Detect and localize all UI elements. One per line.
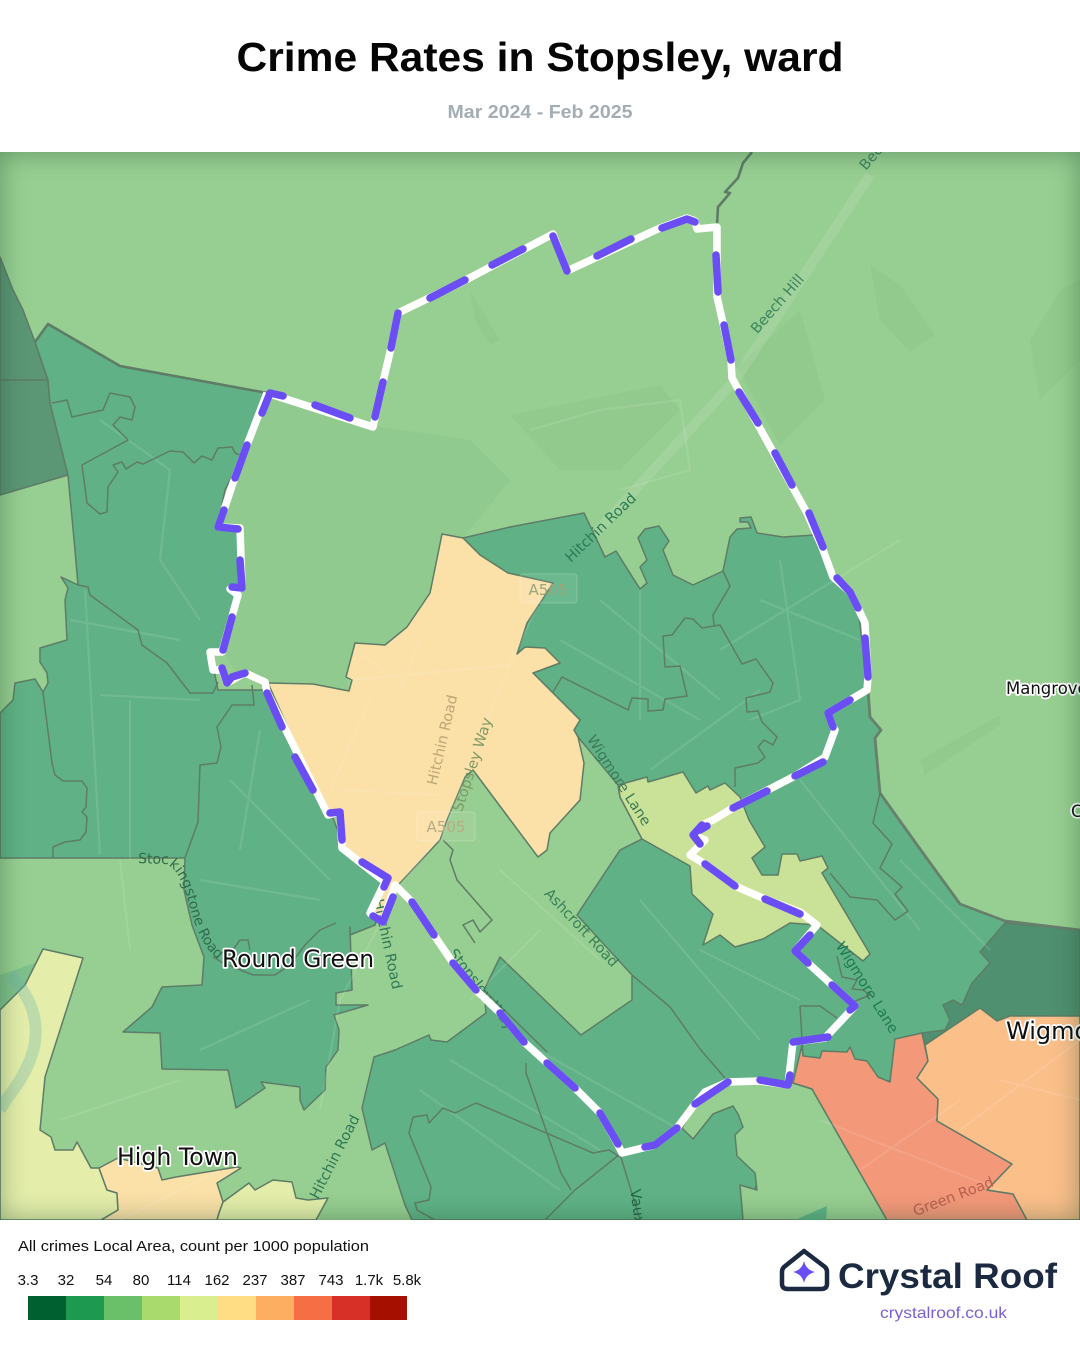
- place: Round Green: Round Green: [222, 945, 374, 973]
- label: Green Road: Green Road: [911, 1175, 996, 1220]
- label: Hitchin Road below ward: Hitchin Road: [370, 898, 404, 991]
- legend scale values: 54: [96, 1272, 112, 1289]
- area: ward north-west fields: [218, 392, 510, 691]
- label: A505 north: A505: [529, 581, 567, 599]
- area: faint terrain patches: [470, 265, 1080, 775]
- legend scale values: 32: [58, 1272, 74, 1289]
- legend colour ramp: [28, 1296, 407, 1320]
- label: Stopsley Way lower: Stopsley Way: [445, 946, 518, 1033]
- legend title: All crimes Local Area, count per 1000 population: [18, 1238, 369, 1255]
- legend: [18, 1238, 422, 1320]
- legend scale values: 237: [242, 1272, 268, 1289]
- logo wordmark: Crystal Roof: [838, 1257, 1057, 1296]
- label: Stopsley Way centre: Stopsley Way: [451, 716, 496, 814]
- label: Stockingstone Road: [138, 863, 220, 961]
- area: cream Stopsley: [268, 534, 584, 920]
- roads: faint street network: [60, 400, 1080, 1220]
- legend scale values: 80: [133, 1272, 149, 1289]
- label: Wigmore Lane south: Wigmore Lane: [832, 939, 901, 1036]
- label: Vauxhall Way: Vauxhall Way: [626, 1188, 656, 1287]
- logo: Crystal Roof: [782, 1251, 1057, 1322]
- label: Hitchin Road centre: Hitchin Road: [425, 693, 461, 787]
- road: Beech Hill and Hitchin Road corridor: [585, 175, 870, 545]
- label: A505 north: [520, 574, 577, 603]
- legend scale values: 5.8k: [393, 1272, 422, 1289]
- label: Hitchin Road south: Hitchin Road: [307, 1113, 363, 1202]
- area: small west patch: [0, 963, 35, 1009]
- legend scale values: 1.7k: [355, 1272, 384, 1289]
- area: dark north-west: [0, 257, 68, 495]
- label: A505 south: A505: [427, 818, 465, 836]
- label: Wigmore Lane north: Wigmore Lane: [583, 733, 654, 829]
- area: central and east mid-green: [362, 513, 1005, 1220]
- title: Crime Rates in Stopsley, ward: [236, 34, 844, 80]
- legend scale values: 743: [318, 1272, 344, 1289]
- lines: neighbourhood boundaries: [0, 152, 1080, 1220]
- label: A505 south: [417, 812, 475, 841]
- area: lime: [618, 772, 870, 961]
- subtitle: date range: Mar 2024 - Feb 2025: [448, 102, 632, 122]
- label: Hitchin Road north: Hitchin Road: [563, 490, 640, 566]
- area: light green south of boundary: [682, 1082, 887, 1220]
- legend scale values: 162: [204, 1272, 230, 1289]
- area: dark south-east: [922, 923, 1080, 1045]
- road labels: Stockingstone Road: [139, 852, 223, 958]
- area: pale yellow south: [217, 1180, 328, 1220]
- ward boundary: [210, 218, 868, 1153]
- area: pale yellow west: [0, 949, 118, 1220]
- legend scale values: [18, 1272, 422, 1289]
- area: cream High Town: [99, 1158, 241, 1220]
- area: west mid-green: [0, 324, 389, 1110]
- road labels: [139, 152, 994, 1220]
- area: river tint: [0, 975, 36, 1110]
- area: salmon: [793, 1033, 1027, 1220]
- legend scale values: 3.3: [18, 1272, 38, 1289]
- legend scale values: 387: [280, 1272, 306, 1289]
- place labels: [117, 679, 1080, 1171]
- label: Beech Hill: Beech Hill: [748, 272, 808, 337]
- legend scale values: 114: [167, 1272, 191, 1289]
- area: sliver: [795, 1206, 827, 1220]
- boundary: white line: [210, 218, 868, 1153]
- label: Beech Hill north: Beech: [857, 129, 898, 174]
- area: peach: [917, 1008, 1080, 1220]
- boundary: purple dashes: [218, 219, 868, 1147]
- icon: house with star: [782, 1251, 827, 1289]
- logo url: crystalroof.co.uk: [880, 1305, 1008, 1322]
- place: High Town: High Town: [117, 1143, 238, 1171]
- label: Ashcroft Road: Ashcroft Road: [541, 886, 621, 971]
